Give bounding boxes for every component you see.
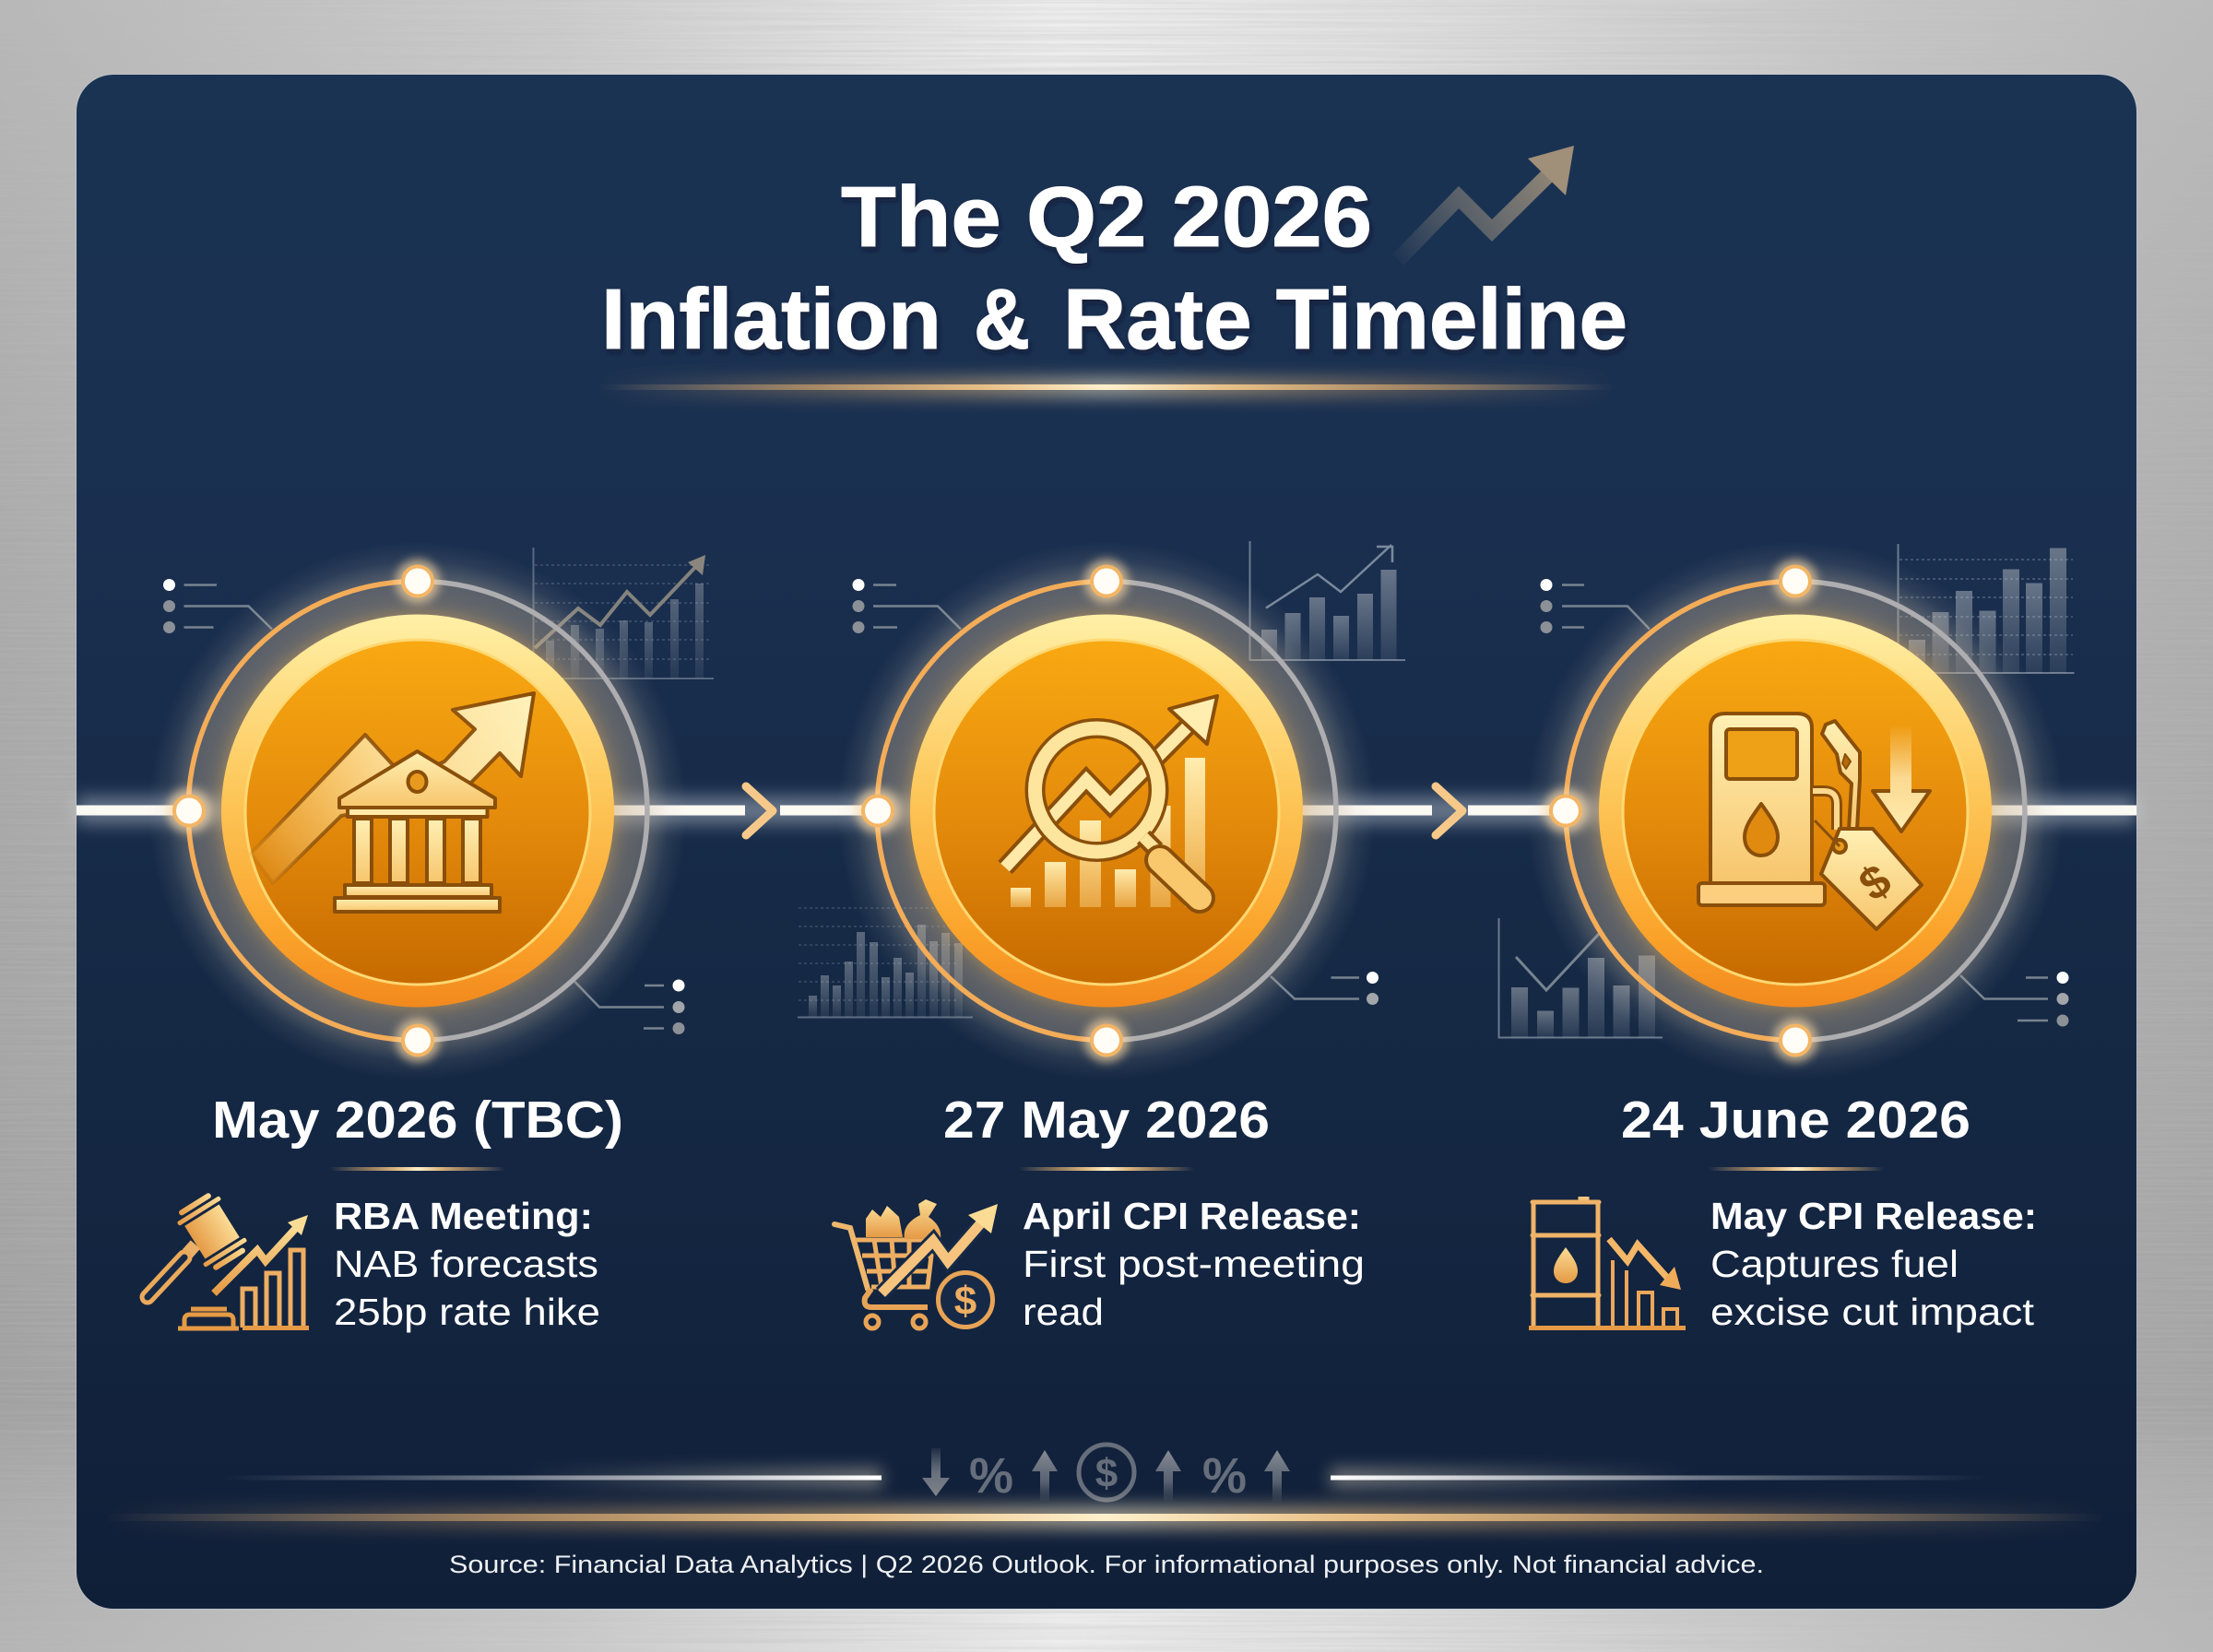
chart: background chart lower left of node two — [798, 908, 973, 1018]
legend: node one top left — [163, 579, 272, 633]
icon: gavel with rising chart — [148, 1188, 309, 1330]
source note: Source: Financial Data Analytics | Q2 2026 Outlook. For informational purposes only. Not financial advice. — [449, 1551, 1764, 1578]
legend: node three top left — [1540, 579, 1650, 633]
event text: May CPI release: excise cut impact — [1710, 1291, 2035, 1333]
footer symbols — [922, 1445, 1290, 1504]
icon: fuel pump, nozzle, falling arrow, price tag — [1698, 714, 1930, 929]
arrow: chevron two — [1436, 786, 1462, 835]
event text: RBA meeting: 25bp rate hike — [334, 1291, 600, 1333]
title: & — [974, 271, 1030, 367]
footer divider lines — [221, 1469, 1987, 1487]
footer symbols: % — [1202, 1448, 1247, 1504]
ring and coin — [1526, 542, 2065, 1080]
node three: fuel pump — [1526, 542, 2065, 1080]
legend: node two top left — [852, 579, 961, 633]
event text: RBA meeting: RBA Meeting: — [334, 1195, 593, 1237]
footer gold line — [105, 1506, 2104, 1528]
legend: node three bottom right — [1960, 972, 2069, 1027]
date: node three: 24 June 2026 — [1621, 1091, 1970, 1150]
event text: April CPI release — [1023, 1195, 1365, 1333]
event text: May CPI release: Captures fuel — [1710, 1243, 1959, 1285]
arrow: chevron one — [746, 786, 773, 835]
ring nodes — [1544, 559, 1817, 1062]
date: node one: May 2026 (TBC) — [212, 1091, 623, 1150]
event text: May CPI release: May CPI Release: — [1710, 1195, 2037, 1237]
chart: background chart lower left of node three — [1499, 918, 1663, 1038]
ring nodes — [167, 559, 440, 1062]
event text: RBA meeting: NAB forecasts — [334, 1243, 598, 1285]
ring nodes — [856, 559, 1129, 1062]
footer symbols: % — [969, 1448, 1013, 1504]
date dividers — [330, 1167, 1884, 1171]
date: node two: 27 May 2026 — [943, 1091, 1270, 1150]
event text: April CPI release: read — [1023, 1291, 1104, 1333]
title: Inflation — [601, 271, 941, 367]
title: The Q2 2026 — [841, 169, 1372, 265]
event text: RBA meeting — [334, 1195, 600, 1333]
event text: May CPI release — [1710, 1195, 2037, 1333]
title underline — [599, 378, 1614, 396]
node one: bank and rate rise — [148, 542, 687, 1080]
event text: April CPI release: April CPI Release: — [1023, 1195, 1361, 1237]
title — [601, 169, 1627, 367]
event text: April CPI release: First post-meeting — [1023, 1243, 1365, 1285]
ring and coin — [148, 542, 687, 1080]
icon: fuel pump, nozzle, falling arrow, price tag: $ — [1850, 854, 1900, 911]
node two: magnifier and CPI — [837, 542, 1376, 1080]
icon: shopping cart with arrow and dollar coin: $ — [954, 1279, 976, 1324]
legend: node one bottom right — [575, 979, 684, 1034]
chart: background chart top right of node three — [1898, 544, 2075, 673]
ring and coin — [837, 542, 1376, 1080]
icon: title rising arrow — [1398, 146, 1574, 260]
icon: oil barrel with falling chart — [1529, 1197, 1686, 1330]
title: Rate Timeline — [1063, 271, 1627, 367]
icon: magnifier over rising chart — [1005, 696, 1217, 907]
timeline line — [77, 796, 2136, 824]
icon: bank with rising arrow — [251, 693, 534, 912]
chart: background chart top right of node two — [1250, 541, 1405, 660]
legend: node two bottom right — [1271, 972, 1379, 1005]
footer symbols: $ — [1095, 1451, 1118, 1496]
icon: shopping cart with arrow and dollar coin — [834, 1199, 998, 1328]
chart: background chart top right of node one — [533, 548, 714, 678]
